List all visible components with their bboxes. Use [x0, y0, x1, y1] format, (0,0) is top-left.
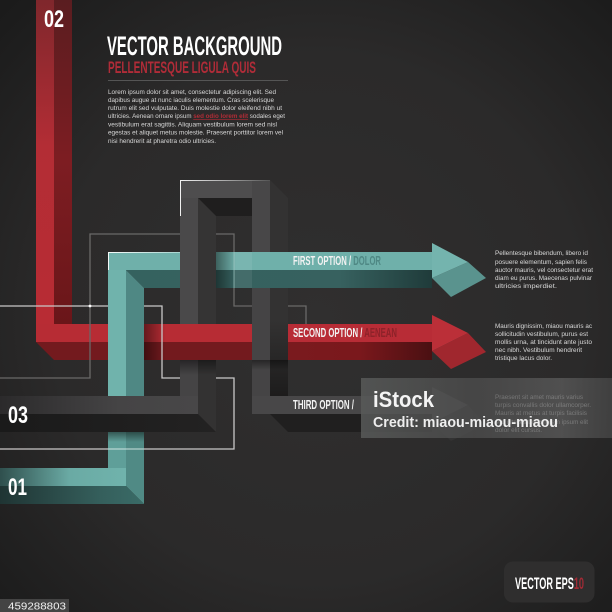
thin connector lines	[0, 234, 306, 449]
intro paragraph: Lorem ipsum dolor sit amet, consectetur adipiscing elit. Sed	[108, 89, 277, 96]
second option description	[495, 323, 593, 362]
third option description: dolor elit cursus.	[495, 427, 542, 434]
intro paragraph: nisi hendrerit at pharetra odio ultricies.	[108, 138, 216, 145]
intro paragraph: ultricies. Aenean ornare ipsum sed odio lorem elit sodales eget	[108, 113, 285, 120]
intro paragraph	[108, 80, 288, 145]
title: VECTOR BACKGROUND	[107, 31, 282, 61]
first option description: ultricies imperdiet.	[495, 283, 557, 290]
gray ribbon: lower section 03	[0, 360, 216, 432]
teal ribbon: lower section 01	[0, 432, 144, 504]
second option description: Mauris dignissim, miaou mauris ac	[495, 323, 592, 330]
intro paragraph: dapibus augue at nunc iaculis elementum. Cras scelerisque	[108, 97, 275, 104]
gray ribbon: top loop and left column	[180, 180, 270, 324]
intro paragraph: egestas et aliquet metus molestie. Praesent porttitor lorem vel	[108, 130, 283, 137]
third option description: sed ultrices tellus lorem ipsum elit	[495, 419, 588, 426]
third option description: Mauris at metus at turpis facilisis	[495, 410, 587, 417]
first option description: diam eu purus. Maecenas pulvinar	[495, 275, 592, 282]
connector line overlays on teal	[108, 252, 252, 449]
intro paragraph: rutrum elit sed vulputate. Duis molestie dolor eleifend nibh ut	[108, 105, 282, 112]
second option description: nec nibh. Vestibulum hendrerit	[495, 347, 582, 354]
subtitle: PELLENTESQUE LIGULA QUIS	[108, 58, 256, 77]
third option description: turpis convallis dolor ullamcorper.	[495, 402, 591, 409]
first option description	[495, 250, 593, 290]
image id tag	[0, 599, 69, 612]
second option description: tristique lacus dolor.	[495, 355, 552, 362]
step number 03: 03	[8, 402, 28, 429]
third arrow (faint, under watermark)	[432, 387, 486, 441]
first option description: posuere elementum, sapien felis	[495, 259, 587, 266]
gray ribbon: right column and third option band	[252, 180, 432, 432]
red ribbon with arrow	[36, 0, 486, 369]
first option description: auctor mauris, vel consectetur erat	[495, 267, 593, 274]
step number 02: 02	[44, 6, 64, 33]
intro paragraph: vestibulum erat sagittis. Aliquam vestibulum lorem sed nisl	[108, 121, 277, 128]
third option label: THIRD OPTION /	[293, 397, 354, 412]
first option description: Pellentesque bibendum, libero id	[495, 250, 589, 257]
second option label: SECOND OPTION / AENEAN	[293, 325, 397, 340]
watermark banner	[361, 378, 612, 438]
connector line end on right column shadow	[252, 360, 288, 370]
second option description: sollicitudin vestibulum, purus est	[495, 331, 588, 338]
watermark banner: Credit: miaou-miaou-miaou	[373, 415, 558, 431]
badge: vector eps 10	[504, 562, 594, 602]
watermark banner: iStock	[373, 387, 435, 412]
step number 01: 01	[8, 474, 27, 501]
first option label: FIRST OPTION / DOLOR	[293, 253, 381, 268]
third option description	[495, 394, 591, 434]
third option description: Praesent sit amet mauris varius	[495, 394, 583, 401]
second option description: mollis urna, at tincidunt ante justo	[495, 339, 593, 346]
teal ribbon with arrow	[108, 243, 486, 396]
